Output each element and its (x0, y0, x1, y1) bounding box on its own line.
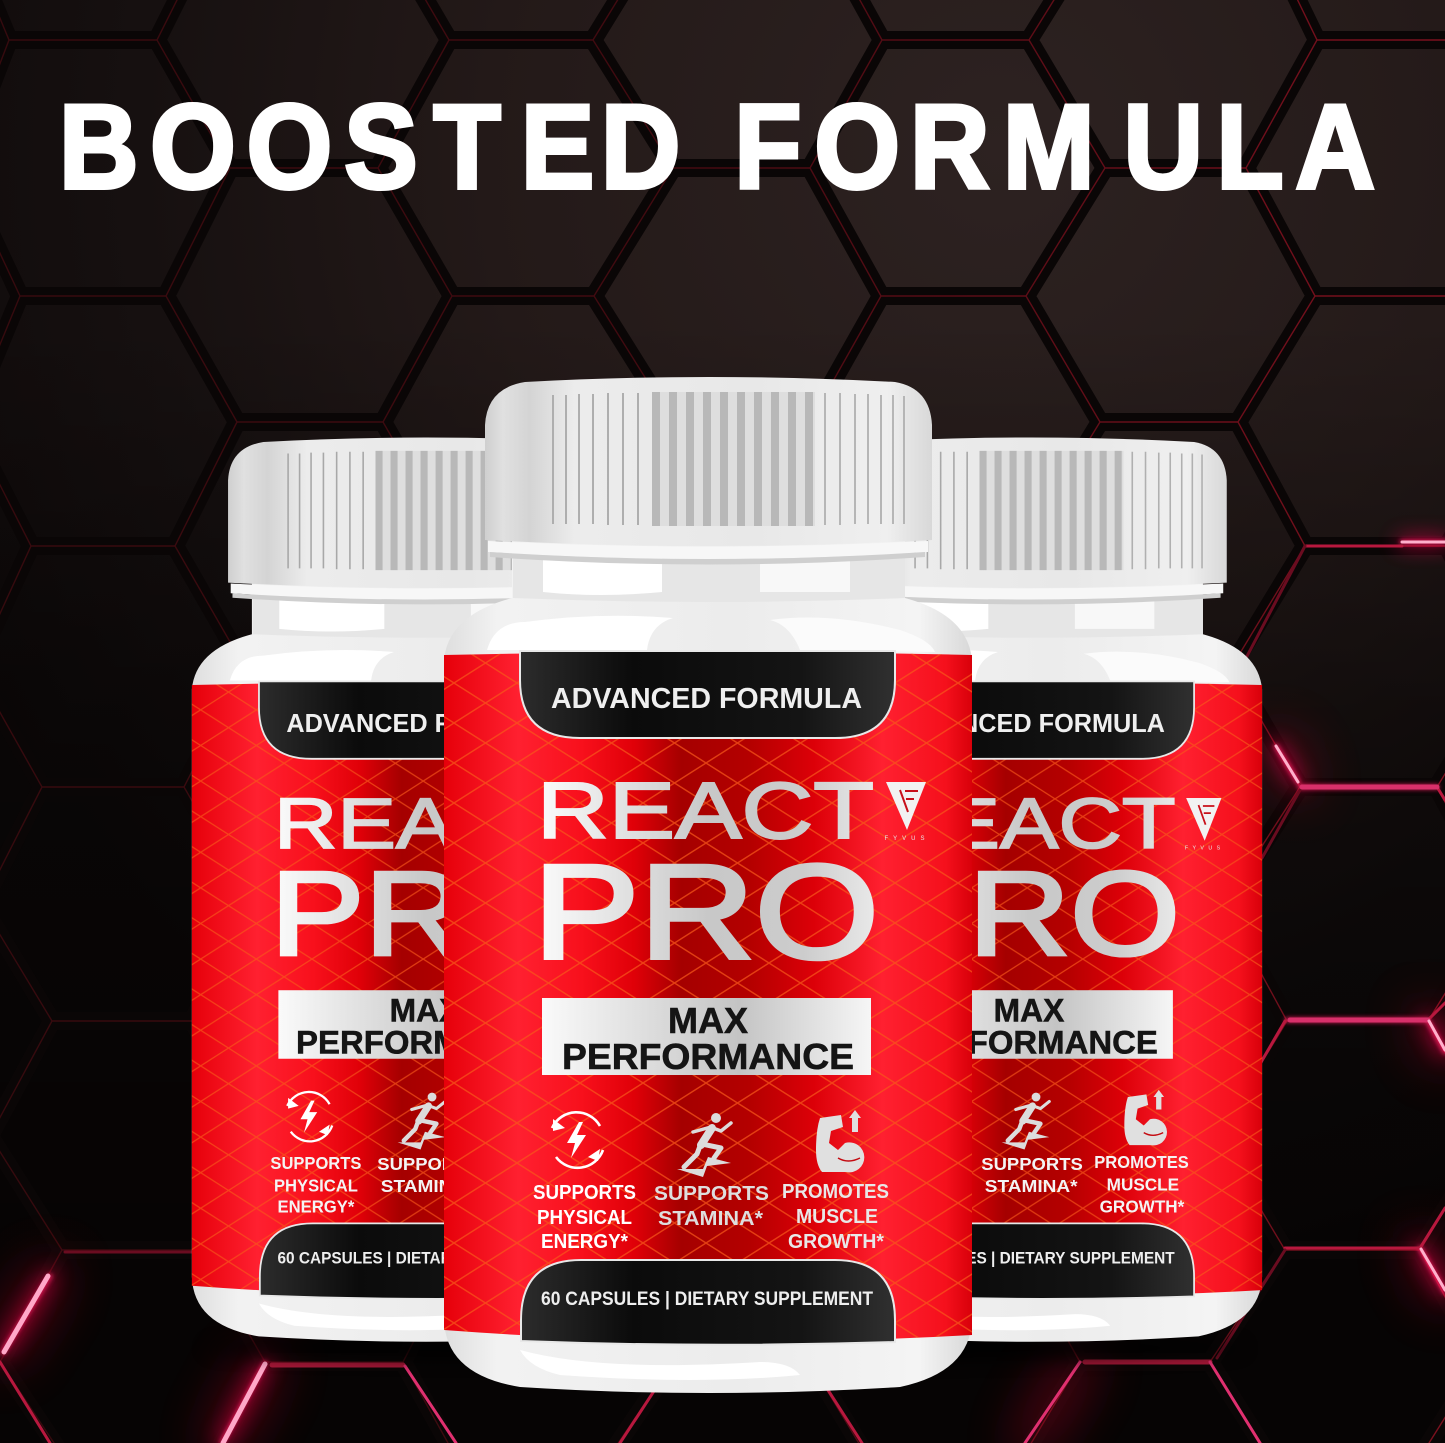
neon glow lines (0, 542, 1445, 1443)
right bottle: PHYSICAL (878, 1175, 962, 1195)
top tab text: ADVANCED FORMULA (551, 683, 862, 715)
right bottle: MAX (994, 992, 1064, 1028)
benefit: physical energy (533, 1182, 636, 1253)
logo caption: FYVUS (884, 836, 930, 842)
benefit: muscle growth (782, 1181, 889, 1253)
benefit: physical energy: SUPPORTS (533, 1182, 636, 1204)
right bottle: FYVUS (1185, 846, 1225, 852)
right bottle: PRO (874, 847, 1180, 981)
left bottle: 60 CAPSULES | DIETARY SUPPLEMENT (278, 1248, 571, 1267)
right bottle: ENERGY* (882, 1197, 958, 1217)
left bottle: PERFORMANCE (296, 1024, 554, 1060)
left bottle: PROMOTES (490, 1152, 585, 1172)
right bottle: 60 CAPSULES | DIETARY SUPPLEMENT (882, 1248, 1175, 1267)
right bottle: SUPPORTS (874, 1153, 966, 1173)
left bottle: ENERGY* (278, 1197, 354, 1217)
benefit: stamina: STAMINA* (658, 1208, 763, 1230)
left bottle: SUPPORTS (270, 1153, 362, 1173)
left bottle: PHYSICAL (274, 1175, 358, 1195)
right bottle: PERFORMANCE (900, 1024, 1158, 1060)
right bottle: GROWTH* (1100, 1197, 1184, 1217)
shadow beneath bottles (205, 1336, 1245, 1360)
right bottle: STAMINA* (985, 1176, 1078, 1196)
right bottle: ADVANCED FORMULA (890, 710, 1165, 738)
left bottle: MUSCLE (503, 1174, 575, 1194)
left bottle: ADVANCED FORMULA (286, 710, 561, 738)
benefit: physical energy: ENERGY* (541, 1231, 628, 1253)
max performance text (562, 1000, 854, 1077)
max performance text: PERFORMANCE (562, 1036, 854, 1077)
right bottle: SUPPORTS (981, 1154, 1083, 1174)
right bottle: PROMOTES (1094, 1152, 1189, 1172)
left bottle: SUPPORTS (377, 1154, 479, 1174)
center bottle shell with cap, label, tabs and icons (444, 377, 972, 1393)
benefit: physical energy: PHYSICAL (537, 1207, 632, 1229)
benefit: muscle growth: GROWTH* (788, 1231, 884, 1253)
benefit: stamina (654, 1183, 769, 1230)
left bottle: STAMINA* (381, 1176, 474, 1196)
benefit: stamina: SUPPORTS (654, 1183, 769, 1205)
left bottle: MAX (390, 992, 460, 1028)
left bottle (192, 438, 658, 1342)
benefit: muscle growth: MUSCLE (796, 1206, 878, 1228)
brand name: REACT (537, 766, 874, 855)
right bottle (796, 438, 1262, 1342)
left bottle: REACT (274, 785, 572, 864)
right bottle: REACT (878, 785, 1176, 864)
bottom tab text: 60 CAPSULES | DIETARY SUPPLEMENT (541, 1289, 873, 1310)
max performance text: MAX (668, 1000, 748, 1041)
left bottle: GROWTH* (496, 1197, 580, 1217)
benefit: muscle growth: PROMOTES (782, 1181, 889, 1203)
right bottle: MUSCLE (1107, 1174, 1179, 1194)
title: BOOSTED FORMULA (59, 81, 1375, 214)
left bottle: PRO (270, 847, 576, 981)
center bottle (444, 377, 972, 1393)
product name: PRO (533, 838, 879, 987)
